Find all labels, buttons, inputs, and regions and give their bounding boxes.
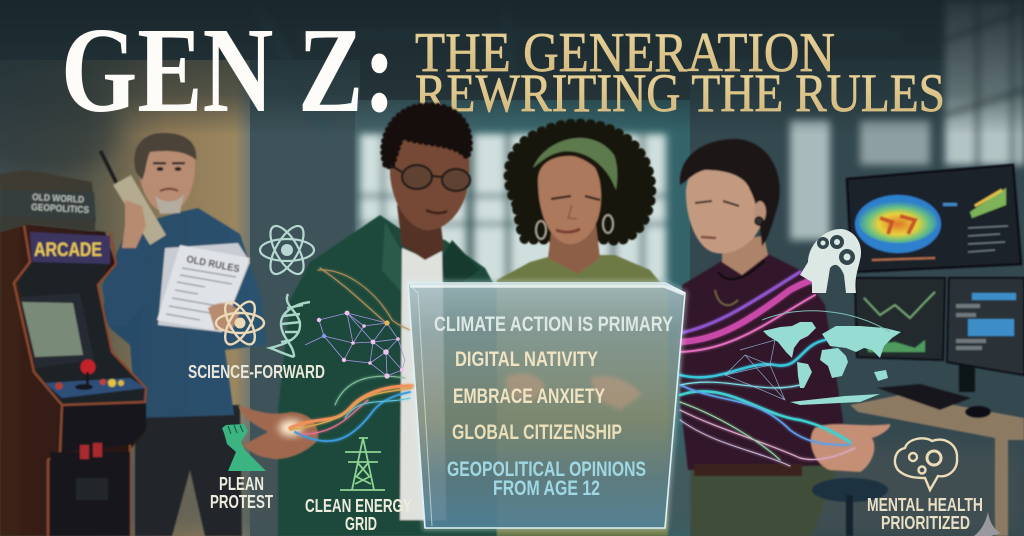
face: [538, 156, 601, 244]
desk: [850, 395, 1024, 536]
olive top: [497, 255, 668, 536]
top monitor: [847, 165, 1021, 272]
person: young man with glasses: [278, 105, 497, 536]
label: clean energy grid: GRID: [345, 514, 377, 534]
hands through the glass: [505, 373, 642, 410]
old rules papers: [157, 243, 250, 332]
desk setup with monitors: [847, 165, 1024, 536]
person: young woman with headband: [497, 123, 668, 536]
label: mental health prioritized: MENTAL HEALTH: [867, 495, 983, 515]
icon: head with gears: [800, 229, 861, 293]
item: digital nativity: DIGITAL NATIVITY: [455, 348, 598, 371]
bottom left monitor: [855, 278, 945, 360]
neck: [397, 205, 444, 260]
left open hand with glow: [238, 405, 318, 459]
hair: [680, 139, 780, 246]
neck: [548, 225, 600, 274]
left data stream into panel: [290, 268, 415, 441]
stool: [812, 478, 888, 502]
head: [138, 133, 195, 213]
ceiling beams: [255, 0, 900, 140]
white tee: [400, 245, 446, 520]
trousers and belt: [692, 465, 838, 536]
title: rewriting the rules: REWRITING THE RULES: [415, 63, 945, 123]
plum shirt: [680, 250, 843, 470]
books: old world geopolitics: OLD WORLD: [32, 192, 84, 206]
title: the generation: THE GENERATION: [415, 22, 835, 84]
face: [390, 128, 469, 230]
item: global citizenship: GLOBAL CITIZENSHIP: [452, 421, 622, 444]
old rules papers: OLD RULES: [185, 254, 241, 275]
curly hair: [508, 123, 652, 241]
trousers: [135, 405, 242, 536]
label: clean energy grid: [305, 496, 412, 534]
screen: [20, 293, 94, 368]
open right hand: [811, 424, 890, 472]
label: science-forward: SCIENCE-FORWARD: [188, 362, 325, 382]
icon: brain with gears: [895, 438, 957, 490]
icon: world map: [762, 311, 901, 405]
marquee with label: ARCADE: [34, 240, 102, 261]
right data stream from panel: [680, 272, 855, 466]
label: plean protest: PROTEST: [210, 492, 273, 512]
marquee with label: [30, 232, 110, 264]
panel list: [434, 313, 673, 500]
older man with phone and old rules: [99, 133, 266, 536]
hand: [122, 200, 146, 250]
title: [61, 3, 945, 138]
green shirt: [278, 215, 497, 536]
item: from age 12: FROM AGE 12: [493, 477, 600, 500]
keyboard: [877, 384, 971, 410]
label: mental health prioritized: [867, 495, 983, 533]
label: mental health prioritized: PRIORITIZED: [881, 513, 970, 533]
label: clean energy grid: CLEAN ENERGY: [305, 496, 412, 516]
books: old world geopolitics: GEOPOLITICS: [31, 202, 89, 216]
title: GEN Z: GEN Z:: [61, 3, 396, 138]
shirt: [100, 208, 266, 418]
hair: [383, 105, 470, 168]
right blurred windows: [790, 0, 1024, 240]
monitor stand: [959, 358, 975, 392]
face: [686, 154, 764, 253]
sparkle watermark: [974, 512, 1001, 536]
item: embrace anxiety: EMBRACE ANXIETY: [453, 385, 605, 408]
arcade cabinet: [0, 224, 146, 536]
glasses: [390, 165, 470, 191]
network mesh: [305, 311, 405, 379]
phone: [113, 175, 166, 245]
icon: atom large: [260, 221, 314, 279]
neck: [722, 236, 768, 275]
bottom right monitor: [947, 278, 1024, 375]
item: geopolitical opinions: GEOPOLITICAL OPINIONS: [447, 458, 646, 481]
books: old world geopolitics: [0, 170, 96, 232]
icon: protest fist: [222, 424, 266, 471]
icon: power pylon: [340, 438, 385, 490]
icon: DNA helix: [270, 294, 310, 357]
person: young person with short hair: [680, 139, 890, 536]
label: plean protest: [210, 474, 273, 512]
center factory window: [360, 134, 666, 284]
headband: [533, 138, 617, 190]
icon: atom cream: [216, 297, 264, 349]
item: climate action: CLIMATE ACTION IS PRIMARY: [434, 313, 673, 336]
glass panel: [408, 283, 685, 528]
label: plean protest: PLEAN: [219, 474, 264, 494]
control panel and joystick: [45, 360, 146, 398]
